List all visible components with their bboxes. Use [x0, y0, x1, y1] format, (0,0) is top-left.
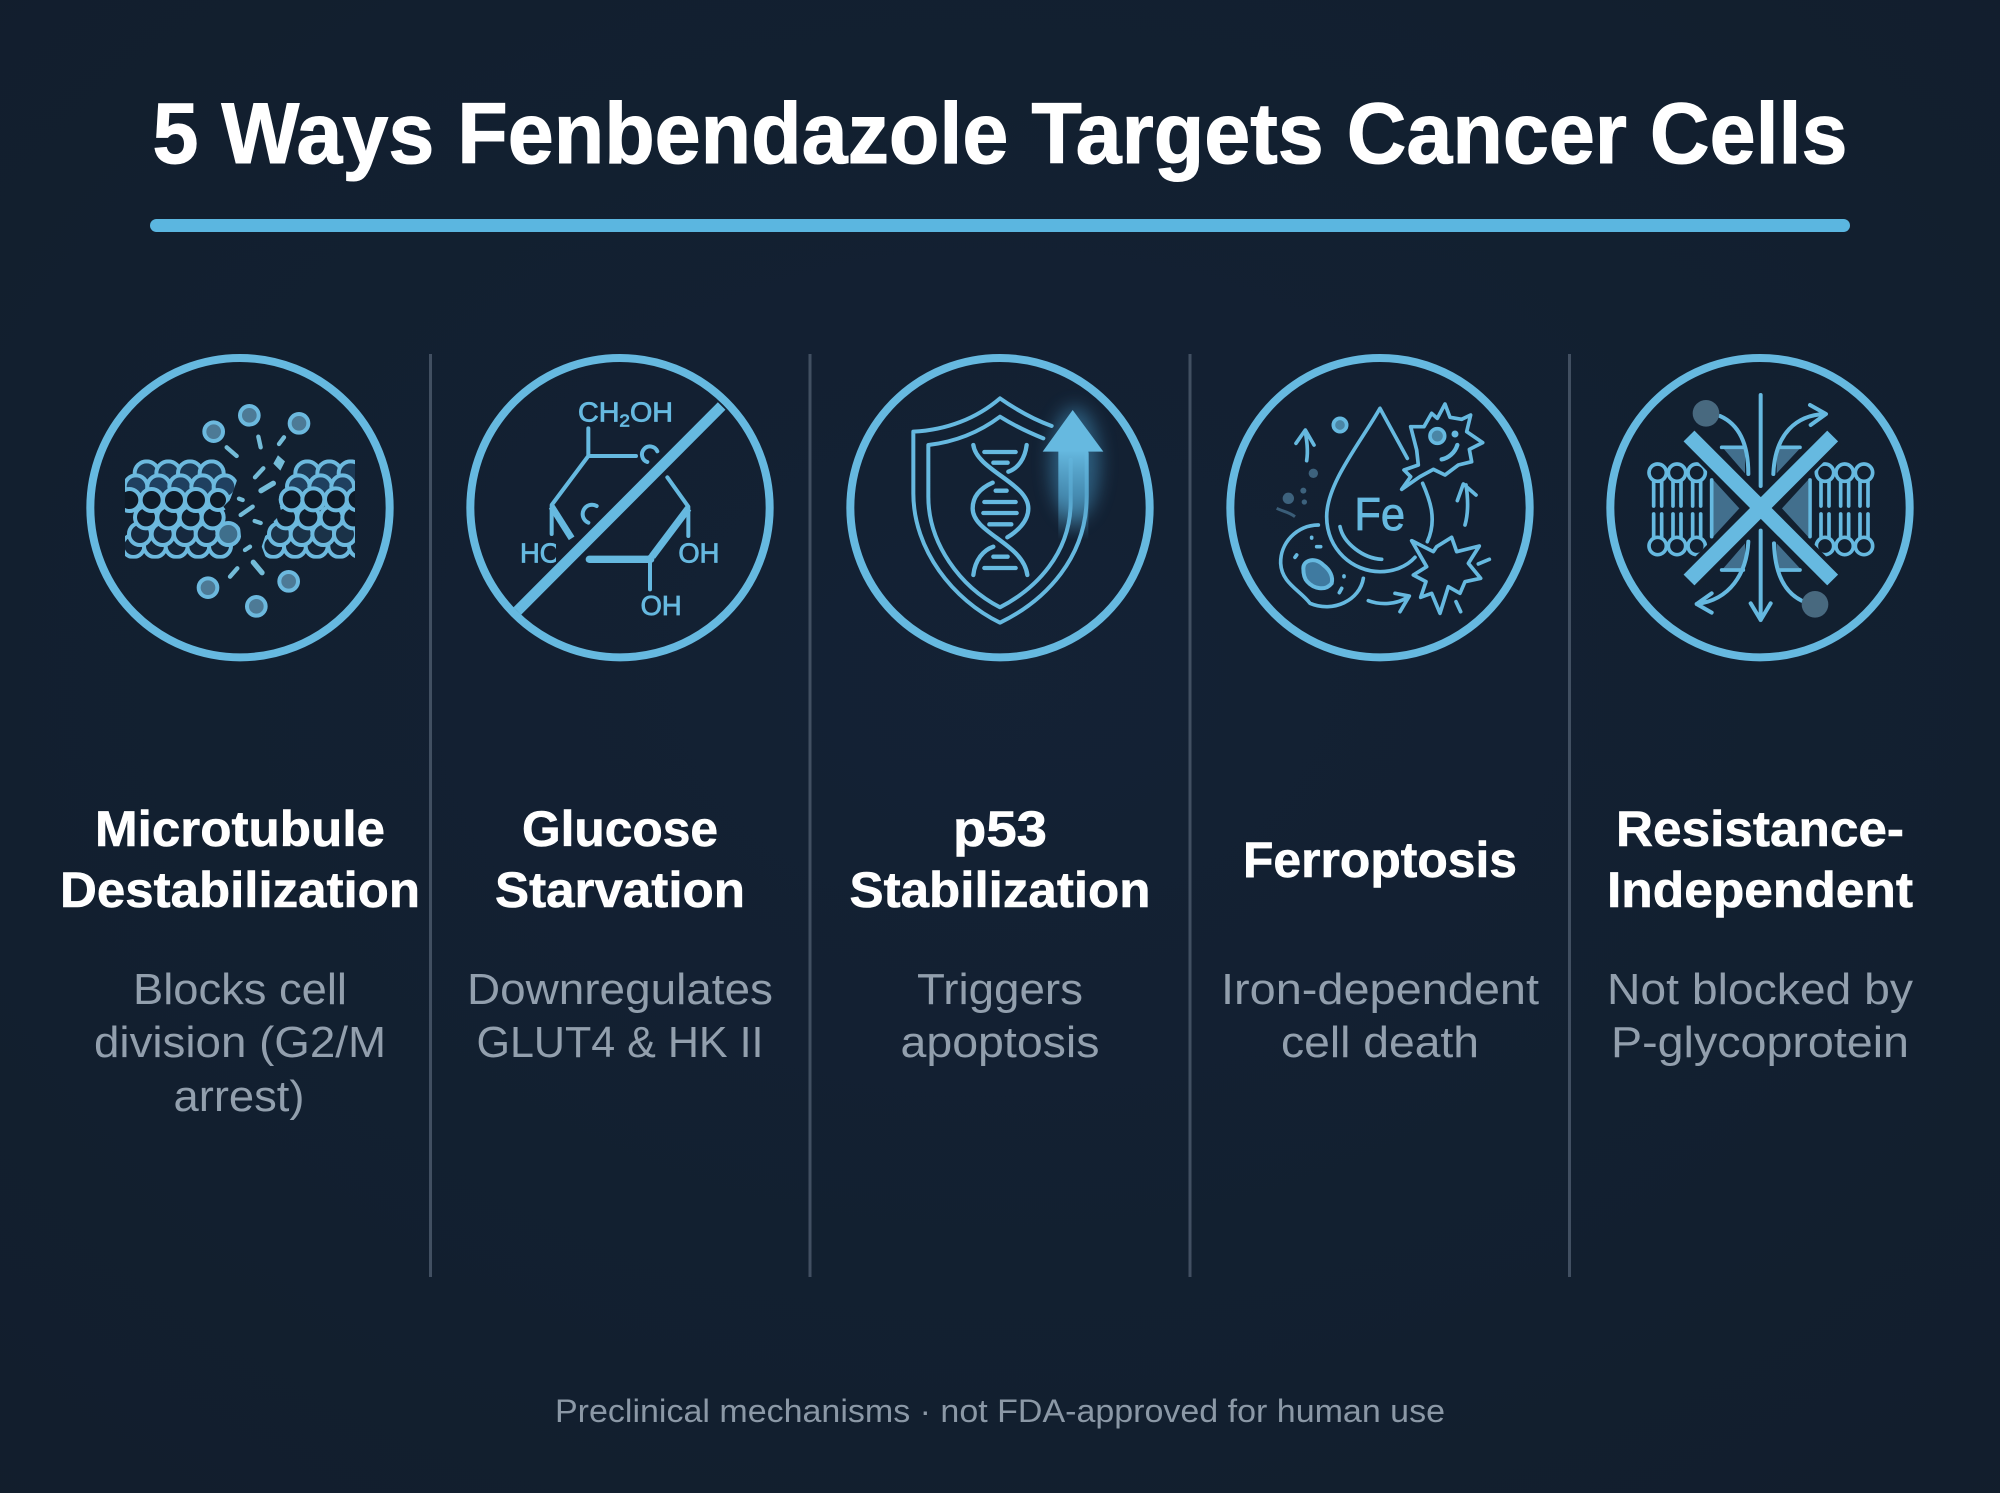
footer note: Preclinical mechanisms · not FDA-approved for human use	[555, 1393, 1445, 1429]
particles: free tubulin dimers	[199, 406, 308, 616]
arrow glow	[1050, 407, 1100, 520]
DNA helix	[973, 445, 1028, 575]
heading: Microtubule Destabilization: Microtubule	[95, 801, 385, 857]
heading: Glucose Starvation	[495, 801, 745, 918]
Fe label: Fe	[1354, 488, 1405, 540]
heading: Resistance-Independent: Independent	[1607, 862, 1913, 918]
glucose ring bonds	[552, 428, 688, 589]
heading: Microtubule Destabilization	[60, 801, 420, 918]
heading: p53 Stabilization: p53	[953, 801, 1047, 857]
heading: p53 Stabilization	[850, 801, 1150, 918]
body: Ferroptosis	[1221, 965, 1539, 1067]
icon: resistance X over efflux pump	[1610, 358, 1910, 657]
arrows	[1296, 430, 1476, 612]
body: Glucose: GLUT4 & HK II	[476, 1018, 764, 1067]
heading: Ferroptosis: Ferroptosis	[1243, 832, 1517, 888]
left lipid bilayer	[1649, 464, 1705, 555]
glucose molecule labels	[520, 397, 719, 621]
body: Glucose: Downregulates	[467, 965, 773, 1014]
body: Microtubule: arrest)	[174, 1072, 304, 1121]
heading: Glucose Starvation: Glucose	[522, 801, 718, 857]
body: Microtubule: division (G2/M	[94, 1018, 386, 1067]
heading: Resistance-Independent	[1607, 801, 1913, 918]
up arrow	[1043, 410, 1103, 540]
body: Microtubule: Blocks cell	[133, 965, 347, 1014]
glucose molecule labels: OH	[630, 397, 673, 428]
shield	[913, 398, 1087, 623]
glucose molecule labels: HO	[520, 537, 561, 568]
substrate balls	[1693, 400, 1828, 618]
X mark	[1689, 436, 1833, 580]
icon: glucose with slash	[470, 358, 770, 657]
membrane: broken microtubule wall	[118, 461, 371, 557]
body: Resistance: P-glycoprotein	[1611, 1018, 1909, 1067]
icon: shield with DNA and arrow	[850, 358, 1150, 657]
glucose molecule labels: 2	[619, 410, 630, 430]
title underline	[150, 219, 1850, 232]
fragments	[227, 437, 284, 577]
body: Resistance	[1607, 965, 1913, 1067]
prohibition slash	[517, 406, 722, 611]
body: Ferroptosis: cell death	[1281, 1018, 1479, 1067]
title: 5 Ways Fenbendazole Targets Cancer Cells	[152, 86, 1848, 182]
healthy cell	[1281, 525, 1363, 607]
heading: Glucose Starvation: Starvation	[495, 862, 745, 918]
iron droplet	[1327, 408, 1432, 572]
free iron ions	[1277, 418, 1347, 517]
glucose molecule labels: OH	[641, 590, 682, 621]
body: p53: apoptosis	[900, 1018, 1100, 1067]
heading: Resistance-Independent: Resistance-	[1616, 801, 1904, 857]
burst cell	[1412, 537, 1489, 613]
glucose molecule labels: CH	[578, 397, 617, 428]
flow arrows	[1697, 395, 1826, 620]
body: Resistance: Not blocked by	[1607, 965, 1913, 1014]
icon: iron drop and ferroptosis	[1230, 358, 1530, 657]
heading: p53 Stabilization: Stabilization	[850, 862, 1150, 918]
body: Ferroptosis: Iron-dependent	[1221, 965, 1539, 1014]
body: p53: Triggers	[917, 965, 1083, 1014]
body: Glucose	[467, 965, 773, 1067]
body: Microtubule	[94, 965, 386, 1121]
body: p53	[900, 965, 1100, 1067]
glucose molecule labels: OH	[678, 537, 719, 568]
spiky dying cell	[1402, 404, 1483, 489]
P-gp transporter	[1712, 447, 1810, 570]
icon: microtubule destabilization	[90, 358, 390, 657]
heading: Microtubule Destabilization: Destabilization	[60, 862, 420, 918]
right lipid bilayer	[1816, 464, 1873, 555]
